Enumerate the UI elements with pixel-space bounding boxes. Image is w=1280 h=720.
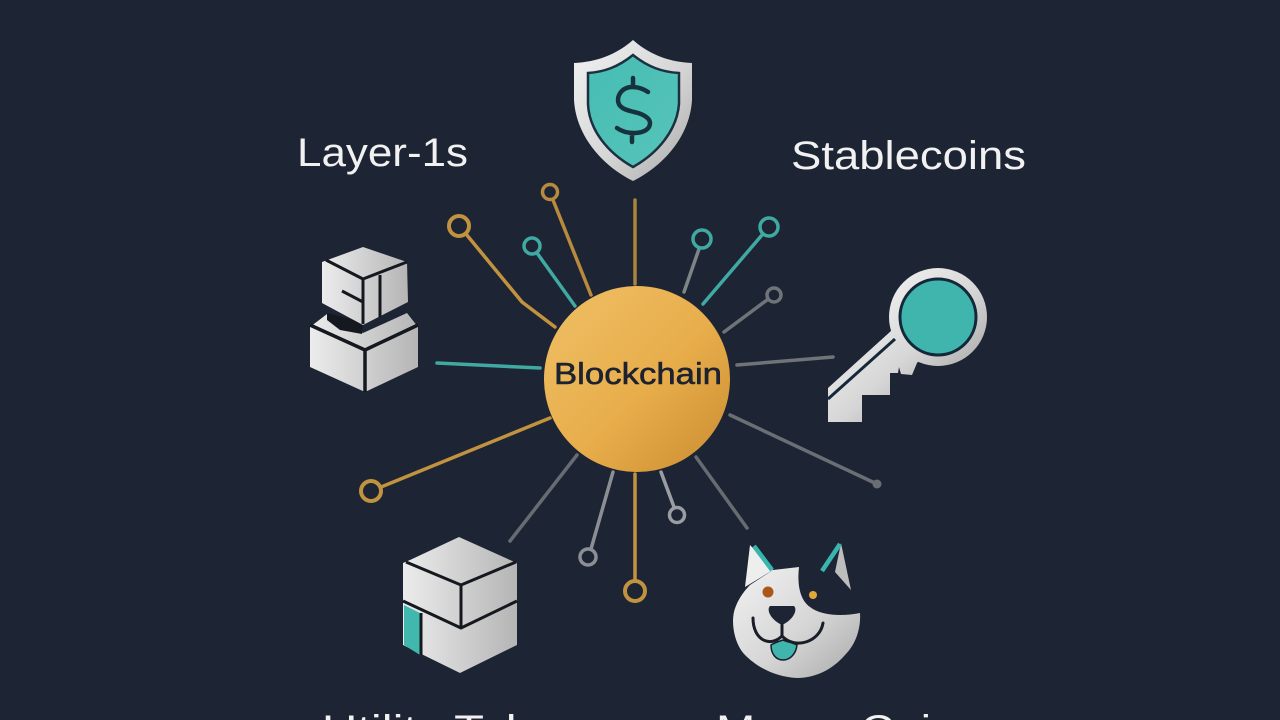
head [733,567,860,678]
icon: stacked cubes for Layer-1s [310,247,418,392]
nose [769,606,795,625]
label: Stablecoins: Stablecoins [791,134,1026,178]
upper cube [322,247,408,325]
left ear [745,545,773,587]
connector: gold lower left [361,418,550,501]
connector: gold upper [542,184,591,295]
eyes [762,586,774,598]
lower cube [310,313,418,392]
connector: gold upper left [449,216,555,327]
connector: teal upper left [524,238,575,306]
connector: grey upper right [724,288,781,332]
connector: grey lower left [510,455,577,541]
connector: grey right [737,357,833,365]
icon: dog for Meme Coins [733,543,860,678]
hub label: Blockchain [554,356,722,391]
label: Layer-1s: Layer-1s [297,131,468,175]
connector: gold top [633,200,637,284]
connector: grey lower right [730,415,882,488]
icon: key [828,268,987,422]
icon: cube for Utility Tokens [403,537,517,673]
connector: gold bottom [625,474,645,601]
key groove [828,339,895,399]
central hub: Blockchain [544,286,730,472]
tongue [771,640,797,660]
mouth [753,618,823,643]
connector: grey lower right short [696,457,747,528]
connector: grey lower short [661,472,684,522]
right ear [835,543,851,590]
teal panel [404,605,420,655]
dollar symbol [617,78,650,142]
connector: teal upper right short [684,230,711,292]
connector: teal upper right long [703,218,778,304]
connector lines [361,184,882,601]
icon: shield with dollar sign [574,40,692,181]
connector: grey lower [580,472,613,565]
connector: teal left [437,363,540,368]
